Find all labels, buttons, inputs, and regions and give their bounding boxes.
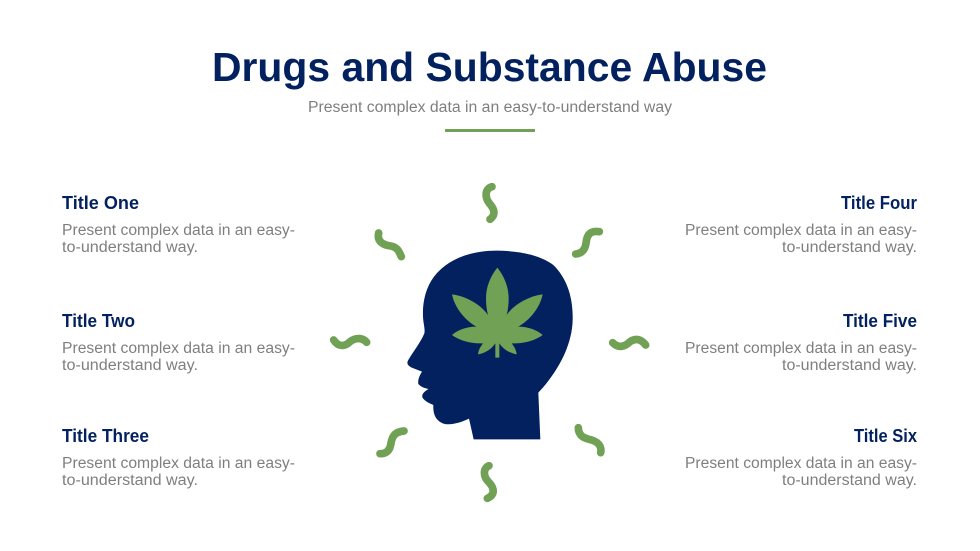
title: Drugs and Substance Abuse	[212, 44, 767, 90]
text block: Title Six	[685, 426, 917, 489]
title underline	[445, 129, 535, 132]
text block: Title One: to-understand way.	[62, 239, 198, 256]
icon: cannabis leaf	[452, 268, 543, 358]
text block: Title Six: Present complex data in an easy-	[685, 455, 917, 472]
text block: Title One: Title One	[62, 193, 139, 213]
text block: Title Six: to-understand way.	[782, 472, 917, 489]
text block: Title Three	[62, 426, 295, 489]
text block: Title Six: Title Six	[854, 426, 917, 446]
central illustration: head with leaf and squiggles	[334, 187, 646, 498]
text block: Title Four	[685, 193, 917, 256]
text block: Title Four: to-understand way.	[782, 239, 917, 256]
icon: head silhouette	[407, 251, 573, 439]
text block: Title Two: Title Two	[62, 311, 135, 331]
text block: Title One	[62, 193, 295, 256]
text block: Title Three: Title Three	[62, 426, 149, 446]
icons: squiggles	[334, 187, 646, 498]
text block: Title Four: Title Four	[841, 193, 917, 213]
text block: Title Five: Present complex data in an easy-	[685, 340, 917, 357]
text block: Title Five: Title Five	[843, 311, 917, 331]
text block: Title Two	[62, 311, 295, 374]
text block: Title Five	[685, 311, 917, 374]
text block: Title Three: to-understand way.	[62, 472, 198, 489]
text block: Title Five: to-understand way.	[782, 357, 917, 374]
subtitle: Present complex data in an easy-to-understand way	[308, 99, 672, 116]
text block: Title Two: Present complex data in an easy-	[62, 340, 295, 357]
text block: Title Four: Present complex data in an easy-	[685, 222, 917, 239]
text block: Title Three: Present complex data in an easy-	[62, 455, 295, 472]
text block: Title One: Present complex data in an easy-	[62, 222, 295, 239]
text block: Title Two: to-understand way.	[62, 357, 198, 374]
